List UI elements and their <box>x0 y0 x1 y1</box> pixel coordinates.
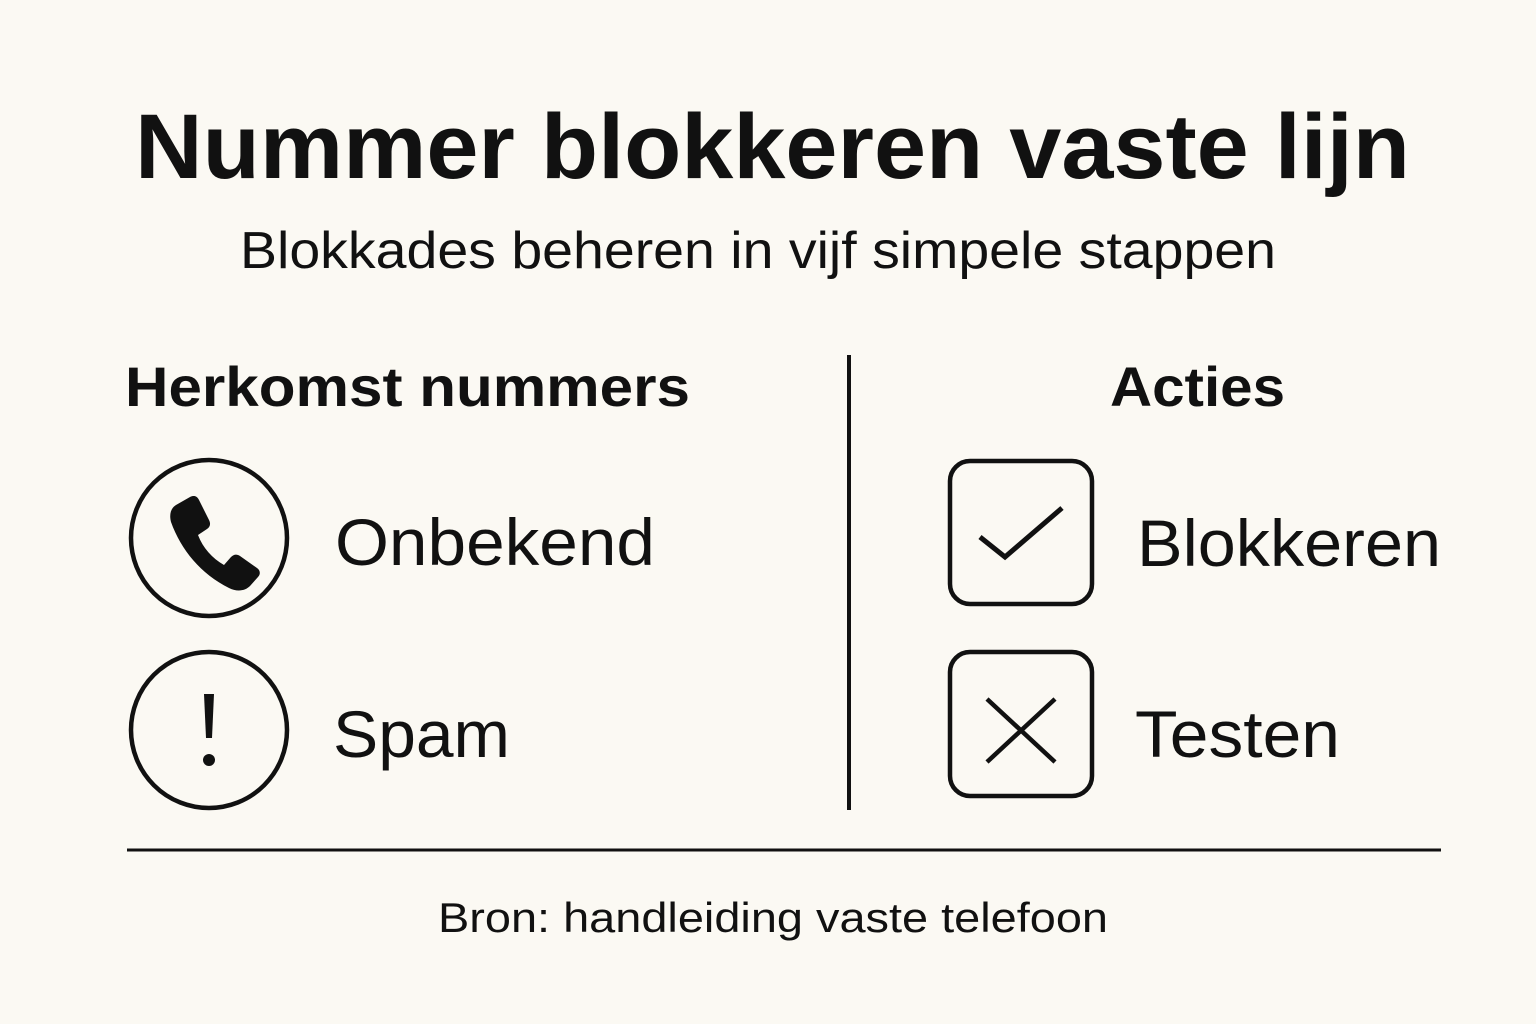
title: Nummer blokkeren vaste lijn <box>135 96 1410 198</box>
icon: cross box <box>950 652 1092 796</box>
heading: Herkomst nummers: Herkomst nummers <box>125 355 690 418</box>
label: Blokkeren: Blokkeren <box>1137 506 1441 580</box>
icon: phone <box>131 460 287 616</box>
label: Testen: Testen <box>1135 697 1340 771</box>
label: Onbekend: Onbekend <box>335 505 655 579</box>
icon: check box <box>950 461 1092 604</box>
heading: Acties: Acties <box>1110 355 1285 418</box>
subtitle: Blokkades beheren in vijf simpele stappen <box>240 222 1276 280</box>
label: Spam: Spam <box>333 697 510 771</box>
icon: exclamation <box>131 652 287 808</box>
footer source: Bron: handleiding vaste telefoon <box>438 894 1108 941</box>
